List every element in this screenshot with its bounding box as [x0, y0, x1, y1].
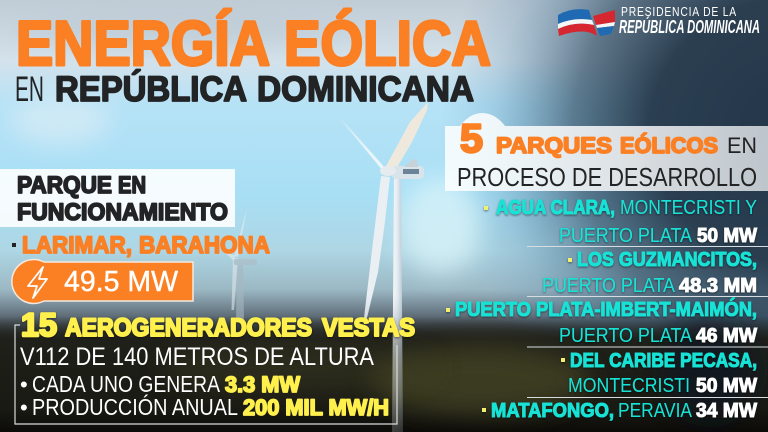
- heading: parque en funcionamiento: PARQUE: [17, 172, 112, 199]
- park name: [22, 232, 270, 259]
- title: [15, 9, 491, 109]
- list item: Puerto Plata-Imbert-Maimón: [446, 297, 757, 347]
- list item: Los Guzmancitos: 48.3 MM: [679, 275, 757, 297]
- park name: LARIMAR,: [22, 232, 132, 259]
- heading: 5 parques eólicos en proceso de desarrollo: 5: [460, 117, 483, 161]
- list item: Del Caribe Pecasa: [561, 350, 757, 397]
- heading: parque en funcionamiento: EN: [118, 172, 146, 199]
- model and height: V112 DE 140 METROS DE ALTURA: [20, 343, 374, 371]
- list item: Matafongo: PERAVIA: [618, 400, 693, 422]
- list item: Puerto Plata-Imbert-Maimón: 46 MW: [696, 325, 757, 347]
- list item: Matafongo: 34 MW: [696, 400, 757, 422]
- list item: Del Caribe Pecasa: 50 MW: [696, 375, 757, 397]
- fact: annual production: PRODUCCIÓN ANUAL: [32, 394, 238, 420]
- panel background: [0, 169, 235, 227]
- capacity badge: [12, 260, 193, 304]
- fact: output per turbine: •: [20, 372, 28, 397]
- heading: Energía Eólica: EÓLICA: [284, 9, 491, 79]
- panel: 5 parques eólicos: [445, 113, 768, 422]
- heading: parque en funcionamiento: [17, 172, 228, 226]
- heading background: [445, 113, 768, 191]
- subtitle: En República Dominicana: EN: [15, 70, 44, 109]
- fact: annual production: [20, 394, 389, 420]
- heading: 15 aerogeneradores vestas: 15: [21, 307, 57, 343]
- subtitle: En República Dominicana: REPÚBLICA: [55, 69, 247, 109]
- subtitle: En República Dominicana: DOMINICANA: [257, 70, 474, 109]
- panel: aerogeneradores: [15, 307, 415, 424]
- fact: annual production: •: [20, 395, 28, 420]
- logo line 1: PRESIDENCIA DE LA: [621, 4, 737, 19]
- capacity value: 49.5 MW: [64, 266, 179, 298]
- list item: Los Guzmancitos: PUERTO PLATA: [542, 275, 676, 297]
- heading: 15 aerogeneradores vestas: [21, 307, 415, 343]
- small background wind turbine: [222, 208, 257, 322]
- heading: Energía Eólica: ENERGÍA: [16, 9, 270, 79]
- heading: Energía Eólica: [16, 9, 491, 79]
- heading: 15 aerogeneradores vestas: AEROGENERADORES: [65, 314, 312, 342]
- fact: annual production: 200 MIL MW/H: [243, 395, 389, 420]
- heading: 5 parques eólicos en proceso de desarrollo: [457, 117, 757, 192]
- list item: Agua Clara: AGUA CLARA,: [496, 197, 615, 219]
- park name: BARAHONA: [139, 232, 270, 259]
- bullet: [12, 243, 16, 247]
- list item: Matafongo: [482, 400, 757, 422]
- list item: Del Caribe Pecasa: MONTECRISTI: [568, 375, 690, 397]
- icon: Dominican flag: [558, 9, 615, 36]
- heading: 5 parques eólicos en proceso de desarrollo: PARQUES: [496, 133, 612, 158]
- logo: Presidencia de la República Dominicana: [558, 4, 760, 37]
- heading: 15 aerogeneradores vestas: VESTAS: [322, 314, 415, 342]
- heading: 5 parques eólicos en proceso de desarrollo: EÓLICOS: [620, 133, 718, 158]
- fact: output per turbine: 3.3 MW: [225, 372, 300, 397]
- icon: lightning bolt: [28, 267, 47, 298]
- list item: Los Guzmancitos: [542, 249, 757, 297]
- main wind turbine: [338, 102, 428, 432]
- list item: Puerto Plata-Imbert-Maimón: PUERTO PLATA: [559, 325, 693, 347]
- subtitle: En República Dominicana: [15, 69, 474, 109]
- panel frame: [15, 325, 397, 424]
- list item: Agua Clara: PUERTO PLATA: [559, 225, 693, 247]
- heading: parque en funcionamiento: FUNCIONAMIENTO: [17, 199, 228, 226]
- heading: 5 parques eólicos en proceso de desarrollo: EN: [727, 133, 757, 158]
- list item: Agua Clara: [484, 197, 757, 247]
- list item: Agua Clara: 50 MW: [697, 225, 757, 247]
- fact: output per turbine: CADA UNO GENERA: [32, 371, 221, 397]
- list item: Matafongo: MATAFONGO,: [491, 400, 614, 422]
- panel: parque en funcionamiento: [0, 169, 270, 304]
